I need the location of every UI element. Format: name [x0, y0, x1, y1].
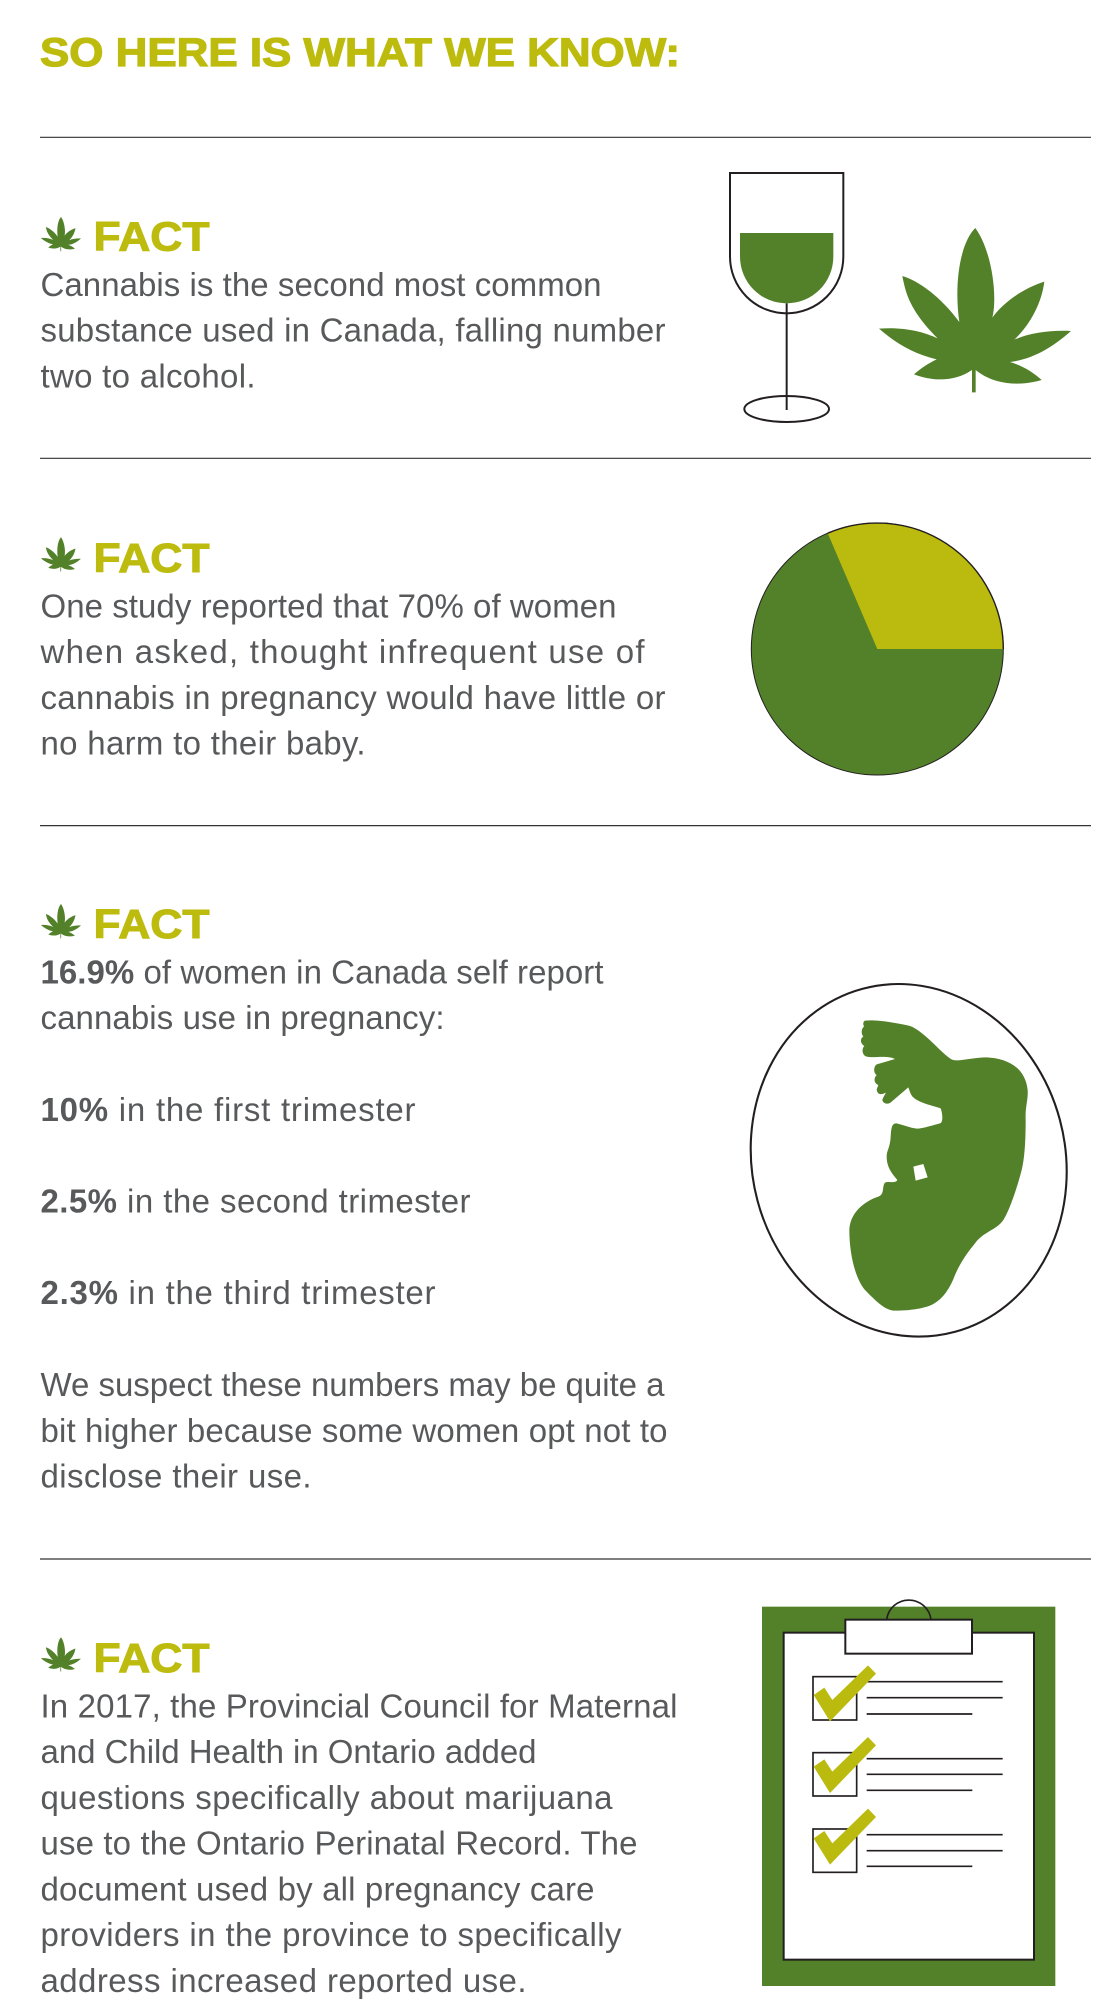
text block: fact 4: use to the Ontario Perinatal Record. The	[40, 1825, 638, 1862]
icon: fetus in womb	[712, 948, 1106, 1372]
icon: small leaf	[41, 1637, 81, 1672]
text block: fact 2: cannabis in pregnancy would have little or	[40, 679, 666, 716]
text block: fact 1	[40, 266, 666, 394]
icon: wine glass	[730, 173, 843, 422]
panel: fact 4 ontario perinatal record	[40, 1600, 1055, 1999]
icon: small leaf	[41, 904, 81, 938]
text block: fact 1: Cannabis is the second most common	[40, 266, 602, 303]
text block: fact 3: 2.5% in the second trimester	[40, 1182, 470, 1219]
text block: fact 4: address increased reported use.	[40, 1962, 526, 1999]
text block: fact 2: no harm to their baby.	[40, 725, 366, 762]
icon: small leaf	[41, 217, 81, 251]
text block: fact 3: We suspect these numbers may be quite a	[40, 1366, 665, 1403]
text block: fact 3: 16.9% of women in Canada self report	[40, 953, 604, 990]
text block: fact 3: 10% in the first trimester	[40, 1091, 416, 1128]
text block: fact 3: cannabis use in pregnancy:	[40, 999, 444, 1036]
panel: fact 2 seventy percent of women	[40, 523, 1003, 775]
heading: fact: FACT	[94, 535, 210, 581]
pie chart: 70 percent	[751, 523, 1003, 775]
text block: fact 4: questions specifically about marijuana	[40, 1779, 613, 1816]
text block: fact 4	[40, 1687, 678, 1999]
text block: fact 3	[40, 953, 668, 1494]
text block: fact 3: bit higher because some women opt not to	[40, 1412, 668, 1449]
text block: fact 4: providers in the province to specifically	[40, 1916, 622, 1953]
text block: fact 2: One study reported that 70% of women	[40, 587, 616, 624]
icon: cannabis leaf	[879, 228, 1071, 392]
heading: fact: FACT	[94, 901, 210, 947]
text block: fact 4: In 2017, the Provincial Council for Maternal	[40, 1687, 678, 1724]
text block: fact 1: two to alcohol.	[40, 357, 256, 394]
title: SO HERE IS WHAT WE KNOW:	[40, 31, 680, 75]
icon: small leaf	[41, 537, 81, 572]
heading: fact: FACT	[94, 1635, 210, 1681]
text block: fact 1: substance used in Canada, falling number	[40, 312, 666, 349]
text block: fact 3: 2.3% in the third trimester	[40, 1274, 436, 1311]
icon: clipboard checklist	[762, 1600, 1055, 1986]
text block: fact 4: document used by all pregnancy care	[40, 1870, 594, 1907]
text block: fact 2: when asked, thought infrequent use of	[40, 633, 645, 670]
heading: fact: FACT	[94, 214, 210, 260]
panel: fact 3 self reported use	[40, 901, 1106, 1494]
text block: fact 2	[40, 587, 666, 762]
text block: fact 3: disclose their use.	[40, 1457, 312, 1494]
text block: fact 4: and Child Health in Ontario added	[40, 1733, 536, 1770]
panel: fact 1 cannabis second most common	[40, 173, 1071, 422]
